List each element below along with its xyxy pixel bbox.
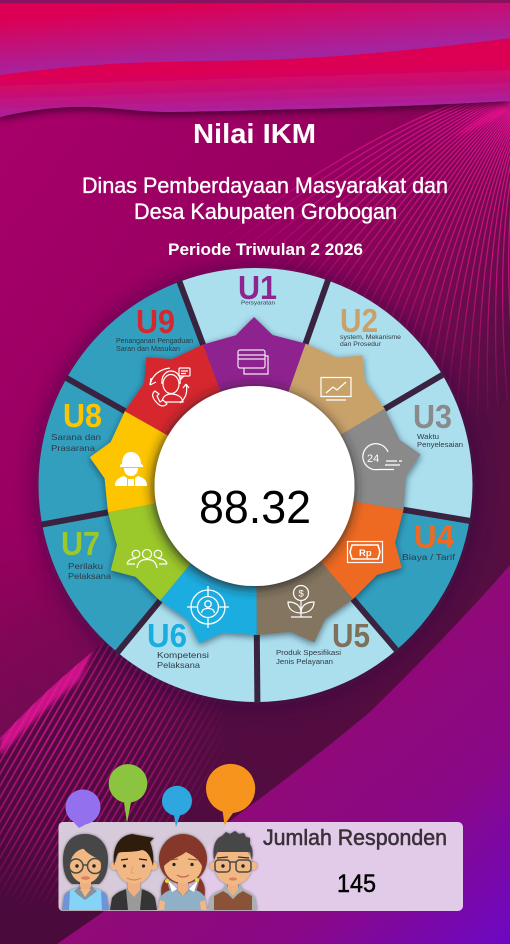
label U7: U7 [61, 525, 100, 562]
right stripe fan [236, 101, 510, 418]
swoosh highlight [0, 646, 95, 756]
lower-left stripes [0, 642, 221, 902]
label U3: Waktu [417, 434, 439, 441]
speech bubble orange [206, 764, 255, 825]
label U2: system, Mekanisme [340, 334, 401, 341]
label U8 [51, 397, 102, 453]
label U1: U1 [238, 269, 277, 306]
icon: money plant [288, 586, 314, 617]
wheel [29, 267, 482, 714]
label U6 [147, 617, 209, 670]
label U9: Penanganan Pengaduan [116, 338, 193, 345]
fan highlight [452, 105, 507, 138]
card number: 145 [337, 870, 376, 898]
label U5: Jenis Pelayanan [276, 659, 333, 666]
wave band upper [0, 3, 510, 75]
gear segments [81, 317, 430, 660]
avatar woman with glasses [62, 834, 109, 910]
period: Periode Triwulan 2 2026 [168, 240, 363, 259]
score: 88.32 [199, 481, 311, 533]
label U4 [402, 518, 456, 562]
label U5 [276, 617, 370, 666]
label U2 [340, 302, 401, 348]
label U2: dan Prosedur [340, 341, 382, 348]
avatar man in jacket [110, 834, 158, 910]
icon: money plant: $ [298, 588, 304, 600]
label U2: U2 [340, 302, 378, 339]
icon: banknote [348, 542, 382, 562]
wave band lower [0, 30, 510, 117]
subtitle [82, 173, 448, 224]
icon: monitor chart [321, 378, 351, 400]
label U5: U5 [332, 617, 370, 654]
icon: group of people [127, 550, 167, 568]
speech bubble blue [162, 786, 192, 827]
label U8: U8 [63, 397, 102, 434]
label U9: Saran dan Masukan [116, 346, 180, 353]
label U4: U4 [414, 518, 455, 555]
label U8: Sarana dan [51, 432, 101, 442]
label U3 [413, 398, 463, 449]
icon: 24 hours: 24 [367, 453, 379, 465]
outer ring segments [29, 267, 482, 714]
label U7: Perilaku [68, 561, 103, 571]
subtitle: Desa Kabupaten Grobogan [134, 199, 397, 224]
purple corner [57, 565, 510, 944]
label U9 [116, 303, 193, 353]
top wave bands [0, 0, 510, 117]
label U3: U3 [413, 398, 452, 435]
speech bubble green [109, 764, 147, 823]
label U7: Pelaksana [68, 571, 111, 581]
label U5: Produk Spesifikasi [276, 650, 341, 657]
label U7 [61, 525, 111, 581]
title: Nilai IKM [193, 118, 316, 149]
label U9: U9 [136, 303, 175, 340]
icon: construction worker [115, 452, 147, 486]
label U6: Pelaksana [157, 660, 200, 670]
icon: cards [238, 350, 268, 374]
avatar woman with braids [158, 834, 207, 910]
avatar man with vest [208, 831, 257, 910]
label U6: U6 [147, 617, 187, 654]
speech bubble purple [65, 789, 100, 828]
center circle [154, 386, 354, 586]
card tint left [58, 822, 230, 911]
icon: customer service agent [150, 368, 190, 406]
card heading: Jumlah Responden [263, 825, 447, 850]
wheel halo [36, 266, 476, 706]
subtitle: Dinas Pemberdayaan Masyarakat dan [82, 173, 448, 198]
label U6: Kompetensi [157, 650, 209, 660]
label U4: Biaya / Tarif [402, 553, 456, 562]
lower-left fade [0, 540, 130, 750]
label U1: Persyaratan [241, 300, 275, 306]
dark swoosh [0, 400, 510, 944]
icon: target person [187, 586, 229, 628]
label U3: Penyelesaian [417, 442, 463, 449]
icon: banknote: Rp [359, 548, 372, 559]
label U8: Prasarana [51, 443, 95, 453]
icon: 24 hours [363, 444, 402, 470]
respondents card [58, 822, 463, 911]
